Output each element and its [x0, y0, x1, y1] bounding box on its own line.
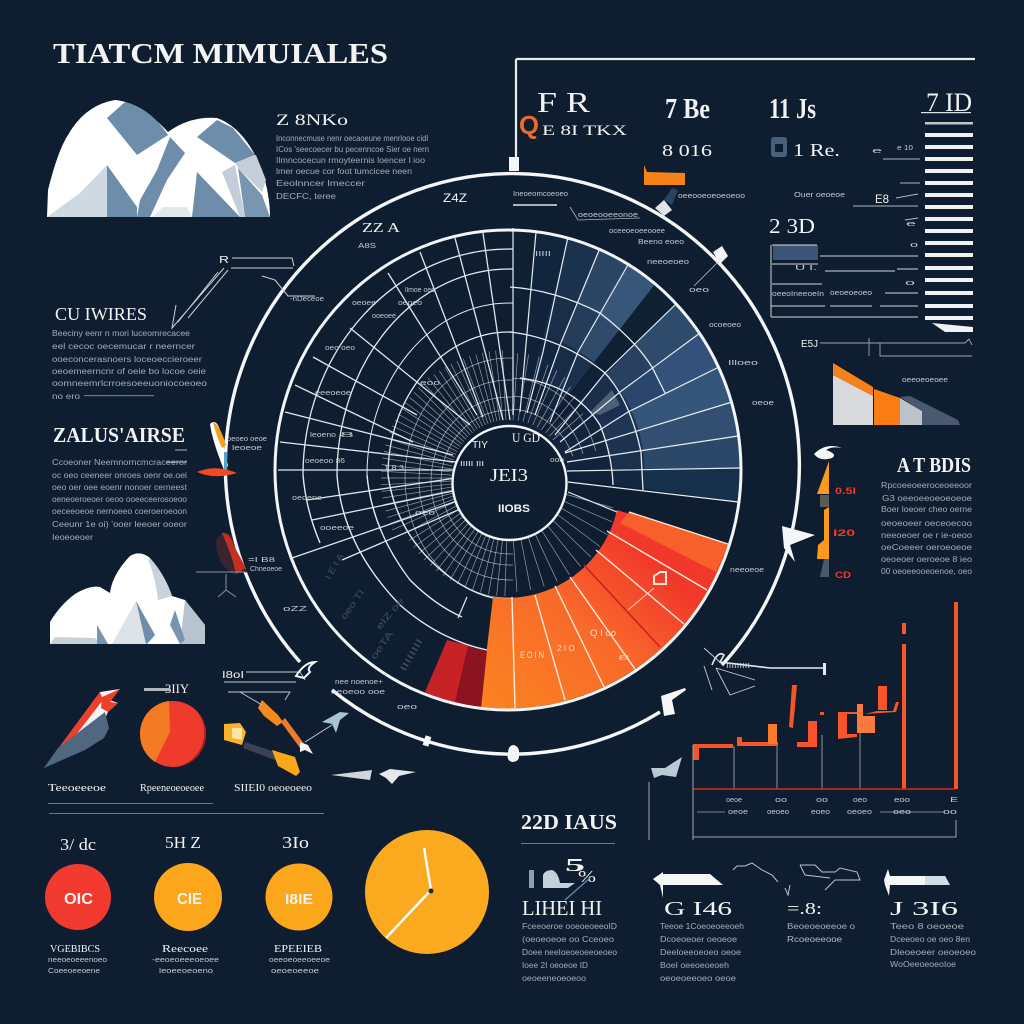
text block: top left note: Inconnecmuse nenr oecaoeune menrlooe cidl — [276, 134, 428, 143]
side labels next to striped column: E8 — [875, 192, 889, 206]
icon: arrow on ring right — [782, 526, 815, 562]
callout lower left of ring — [283, 606, 417, 711]
callout labels upper right of ring: oeo — [689, 287, 709, 294]
text block: left section one: no ero — [52, 392, 81, 401]
title: TIATCM MIMUIALES — [53, 38, 388, 70]
tiny chart labels: Q I oo — [590, 628, 616, 638]
text block: left section two: oeceeoeoe nernoeeo coeroeroeoon — [52, 507, 187, 516]
callout labels upper right of ring: Ineoeomcoeoeo — [513, 191, 568, 198]
heading: bottom section: 22D IAUS — [521, 810, 617, 834]
stat: F R: Q — [519, 110, 539, 140]
radial grid: left arcs — [302, 248, 596, 651]
text block: left section two: Ieoeoeoer — [52, 533, 93, 542]
icon: chair marker left of ring — [196, 533, 282, 597]
side labels next to striped column: o — [905, 280, 915, 287]
tiny chart labels: oeo oeo — [325, 345, 355, 352]
ghost labels lower left of wheel: eIZ oe — [374, 596, 406, 631]
bar chart labels: E — [950, 797, 959, 804]
bar chart labels: oeoeo — [847, 809, 872, 816]
column one: chart icon and text: oeoeeneoeoeoo — [522, 974, 587, 983]
text block: left section two: oc oeo ceeneer onroes oenr oe.oei — [52, 471, 187, 480]
tiny chart labels: ooeoee — [372, 313, 396, 320]
column one: chart icon and text: (oeoeoeoe oo Cceoeo — [522, 935, 615, 944]
text block: right column — [881, 481, 973, 576]
text block: right column: Boer loeoer cheo oerne — [881, 505, 973, 514]
vertical orange gauge: 0.5I — [835, 486, 856, 496]
column two: arrow and text: Teeoe 1Coeoeoeeoeh — [660, 922, 744, 931]
rocket, pie and tool captions: SIIEI0 oeoeoeeo — [234, 783, 312, 794]
text block: top left note — [276, 134, 429, 201]
line above left section two text — [167, 450, 187, 462]
callout upper left of ring — [172, 255, 324, 328]
callout lower left of ring: neoeoo ooe — [331, 689, 385, 696]
rocket, pie and tool captions: 3IIY — [165, 681, 190, 696]
column three: map line icon and text — [733, 863, 860, 944]
orange and red sector — [425, 510, 728, 709]
vertical orange gauge: I20 — [833, 528, 855, 538]
blue sector wedges — [510, 230, 740, 502]
column four: arrow and text: Teeo 8 oeoeoe — [890, 922, 965, 931]
stat circle: red: neeoeoeeenoeo — [48, 957, 107, 964]
icon: large mountain — [47, 100, 270, 217]
column four: arrow and text: WoOeeoeoeoIoe — [890, 960, 957, 969]
text block: right column: oeoeoeer oeceoecoo — [881, 519, 973, 528]
text block: right column: Rpcoeeoeeroceoeeoor — [881, 481, 972, 490]
callout labels upper right of ring: Ouer oeoeoe — [794, 192, 845, 199]
side labels next to striped column — [853, 145, 920, 287]
circle outline inner ring — [275, 230, 741, 710]
column one: chart icon and text: Doee neeIoeoeoeeoeoeo — [522, 948, 618, 957]
icon: torch tool — [224, 700, 349, 776]
tiny chart labels: oeoene — [292, 495, 322, 502]
stat circle: orange one — [152, 833, 222, 975]
text block: left section two: oeo oer oee eoenr nonoer cerneest — [52, 483, 188, 492]
text block: top left note: lmer oecue cor foot tumcicee neen — [276, 167, 412, 176]
bar chart labels: eoo — [894, 797, 910, 804]
scale line: E5J — [801, 339, 818, 350]
text block: left section two: Ccoeoner Neemnorncmcraceeror — [52, 458, 187, 467]
tiny chart labels: oeoeoo 86 — [305, 458, 345, 465]
callout labels upper right of ring: Beeno eoeo — [638, 239, 684, 246]
callout labels upper right of ring: oceeoeoeeooee — [609, 228, 665, 235]
section dividers — [48, 803, 324, 814]
outer ring — [225, 174, 799, 754]
icon: swirl — [814, 446, 842, 459]
arrow icons below ring — [331, 769, 416, 784]
text block: top left note: ICos 'seecoecer bu pecenncoe Sier oe nern — [276, 145, 429, 154]
heading: right column: A T BDIS — [897, 453, 971, 477]
bar chart labels: oeoe — [726, 797, 742, 804]
ring marker bottom — [423, 735, 519, 762]
column two: arrow and text: Dcoeoeoer oeoeoe — [660, 935, 738, 944]
column four: arrow and text: Dceeoeo oe oeo 8en — [890, 935, 970, 944]
chart hub — [452, 426, 566, 540]
callout upper left of ring: R — [219, 255, 229, 266]
stat: F R — [519, 87, 627, 140]
tiny chart labels: IIIII — [535, 251, 551, 258]
pie icon — [140, 701, 206, 767]
ghost labels lower left of wheel: I E I A — [323, 552, 346, 581]
striped column — [925, 122, 973, 332]
bar chart labels — [726, 797, 959, 816]
column four: arrow and text: J 3I6 — [890, 898, 958, 920]
mini table: oeoeoeoeo — [830, 290, 872, 297]
tiny chart labels: eeeoeoe — [315, 390, 351, 397]
side labels next to striped column: e — [906, 221, 916, 228]
bar chart labels: oo — [816, 797, 828, 804]
callout: ring top label: A8S — [358, 243, 376, 250]
callout labels upper right of ring — [513, 191, 845, 574]
bar chart labels: eoeo — [811, 809, 830, 816]
mini table: oeeoIneeoeIn — [772, 291, 824, 298]
callout labels upper right of ring: oeoe — [752, 400, 774, 407]
stat circle: red: VGEBIBCS — [50, 943, 100, 955]
column one: chart icon and text: Fceeoerоe ooeoeoeeoID — [522, 922, 617, 931]
bar chart axis — [693, 788, 956, 790]
stat circle: red: OIC — [64, 891, 93, 908]
callout: ring top label — [358, 191, 467, 250]
chart hub: IIOBS — [498, 503, 530, 515]
stat circle: orange two — [266, 833, 332, 975]
heading: left section one: CU IWIRES — [55, 304, 147, 324]
ghost labels lower left of wheel: oeTA — [368, 629, 395, 661]
column two: arrow and text: oeoeoeeoeo oeoe — [660, 974, 737, 983]
divider under heading — [521, 843, 615, 844]
side labels next to striped column: o — [910, 242, 918, 249]
stat circle: orange two: oeeoeoeeoeeoe — [269, 957, 330, 964]
stat circle: orange one: -eeoeoeeeoeoee — [152, 957, 219, 964]
callout lines near tools — [224, 662, 315, 705]
chart callout — [704, 648, 826, 695]
text block: left section one: oomneemrlcrroesoeeuoniocoeoeo — [52, 379, 208, 388]
tiny chart labels: E O I N — [520, 650, 544, 660]
icon: pin left of ring: oeoeo oeoe — [227, 436, 267, 443]
column two: arrow and text: G I46 — [664, 898, 732, 920]
text block: right column: neeoeoer oe r ie-oeoo — [881, 531, 973, 540]
text block: left section one: Beeciny eenr n mori luceomrecacee — [52, 329, 191, 338]
tiny chart labels: eoo — [420, 380, 440, 387]
heading: mini table: 2 3D — [769, 214, 815, 238]
scale line — [801, 338, 972, 356]
text block: top left note: Eeolnncer lmeccer — [276, 179, 365, 188]
ghost labels lower left of wheel: oeo TI — [338, 588, 366, 621]
stat: 7 ID: 7 ID — [926, 88, 972, 117]
area chart: oeeoeoeoee — [902, 377, 948, 384]
column two: arrow and text: Deeloeeoeoeo oeoe — [660, 948, 742, 957]
tool callout label: I8oI — [222, 670, 244, 681]
column three: map line icon and text: =.8: — [787, 899, 822, 918]
bar chart labels: oo — [775, 797, 787, 804]
text block: left section two — [52, 458, 188, 542]
stat circle: orange one: leoeeoeoeno — [159, 968, 213, 975]
text block: left section one: oeoemeerncnr of oeie bo locoe oeie — [52, 367, 207, 376]
vertical orange gauge — [817, 461, 856, 580]
mini table — [771, 245, 918, 317]
icon: small mountain — [50, 553, 205, 644]
tiny chart labels: oeo — [415, 510, 435, 517]
stat circle: orange two: 3Io — [282, 833, 309, 852]
radial grid: major left spokes — [278, 233, 510, 560]
text block: left section two: oeneoeroeoer oeoo ooeeceerosoeoo — [52, 495, 188, 504]
stat circle: orange two: I8IE — [285, 891, 313, 908]
text block: left section one: ooeconcerasnoers loceoeccieroeer — [52, 355, 202, 364]
side labels next to striped column: e — [872, 148, 882, 155]
tiny chart labels: oeoeo — [398, 300, 422, 307]
column three: map line icon and text: Rcoeoeeooe — [787, 935, 843, 944]
chart callout: IIIIIIIII — [726, 663, 750, 670]
column one: chart icon and text — [522, 855, 618, 983]
rocket, pie and tool captions: Teeoeeeoe — [48, 782, 106, 794]
bar chart labels: oeoeo — [767, 809, 789, 816]
tiny chart labels: oeoee — [352, 300, 376, 307]
tiny chart labels: 8 — [618, 655, 630, 662]
stat: 11 Js — [769, 94, 840, 160]
text block: right column: oeoeoer oeroeoe 8 ieo — [881, 555, 973, 564]
stat circle: orange one: CIE — [177, 891, 202, 908]
area chart — [833, 363, 960, 425]
tiny chart labels: llmoe oeo — [405, 287, 435, 294]
stat circle: orange two: oeoeoeeoe — [271, 968, 319, 975]
bar chart bars — [693, 602, 958, 789]
tiny chart labels: 1 8 3 — [384, 465, 404, 472]
stat: 7 Be: 7 Be — [665, 94, 710, 125]
mini table: U I. — [795, 265, 817, 272]
tiny chart labels: 8 — [340, 432, 354, 439]
callout: ring top label: Z4Z — [443, 191, 467, 205]
heading: top left note: Z 8NKo — [276, 112, 348, 129]
stat: F R: E 8I TKX — [542, 123, 627, 139]
radial grid: thin spokes — [381, 350, 613, 596]
chart hub: IIIII III — [460, 461, 484, 468]
stat circle: orange one: 5H Z — [165, 833, 201, 852]
bar chart labels: oeoe — [728, 809, 748, 816]
chart hub: ooo — [550, 457, 564, 464]
chart hub: TIY — [472, 440, 488, 451]
bar chart stems — [734, 733, 860, 789]
icon: ring marker lower right — [661, 688, 686, 716]
column four: arrow and text — [884, 869, 977, 969]
callout labels upper right of ring: Illoeo — [728, 360, 758, 367]
stat circle: orange one: Reecoee — [162, 943, 208, 955]
rocket, pie and tool captions: Rpeeneoeoeoee — [140, 783, 205, 794]
callout labels upper right of ring: neeoeoe — [730, 567, 764, 574]
column two: arrow and text — [653, 872, 744, 983]
stat: 7 Be: 8 016 — [662, 141, 712, 160]
column one: chart icon and text: 5 — [565, 855, 585, 875]
bar chart labels: oo — [943, 809, 957, 816]
tiny chart labels: ooeeoe — [320, 525, 354, 532]
text block: left section one — [52, 329, 208, 401]
icon: pin left of ring — [197, 422, 267, 476]
column three: map line icon and text: Beoeoeoeeoe o — [787, 922, 856, 931]
callout lower left of ring: oeo — [397, 704, 417, 711]
tiny chart labels: 2 I O — [557, 644, 575, 653]
rocket, pie and tool captions — [48, 681, 312, 794]
callout: ring top label: ZZ A — [362, 221, 401, 236]
ghost labels lower left of wheel: IIIIIIII — [398, 637, 425, 673]
stat circle: orange two: EPEEIEB — [274, 943, 322, 955]
chart hub: U GD — [512, 430, 540, 445]
column one: chart icon and text: % — [578, 867, 596, 886]
bar chart labels: oeo — [893, 809, 911, 816]
callout labels upper right of ring: oeoeooeeonoe — [578, 212, 638, 219]
callout upper left of ring: -nDeceoe — [290, 296, 324, 303]
text block: top left note: DECFC, teree — [276, 192, 337, 201]
stat circle: red — [45, 835, 111, 975]
column two: arrow and text: BoeI oeeoeoeoeh — [660, 961, 729, 970]
small wing icon — [651, 757, 682, 778]
icon: ring knob upper right — [655, 188, 728, 264]
bar chart labels: oeo — [853, 797, 867, 804]
orange flag — [644, 165, 685, 185]
text block: left section two: Ceeunr 1e oi) 'ooer leeoer ooeor — [52, 520, 187, 529]
callout labels upper right of ring: ocoeoeo — [709, 322, 741, 329]
bar chart brackets — [649, 745, 956, 840]
stat circle: red: Coeeoeeoene — [48, 968, 100, 975]
icon: rocket — [44, 689, 120, 768]
callout lower left of ring: oZZ — [283, 606, 308, 613]
callout lower left of ring: nee noenoe+ — [335, 679, 383, 686]
text block: top left note: Ilmncocecun rmoyteernis loencer l ioo — [276, 156, 426, 165]
heading: left section two: ZALUS'AIRSE — [53, 423, 185, 447]
icon: chair marker left of ring: Chneoeoe — [250, 566, 282, 573]
blue sector grid — [513, 228, 740, 512]
stat: 11 Js: 1 Re. — [793, 140, 840, 160]
column four: arrow and text: Dleoeoeer oeoeoeo — [890, 948, 977, 957]
callout labels upper right of ring: neeoeoeo — [647, 259, 689, 266]
top frame — [509, 59, 975, 171]
stat circle: red: 3/ dc — [60, 835, 96, 854]
stat: F R: F R — [537, 87, 591, 119]
tiny chart labels: leoeno — [310, 432, 336, 439]
bar chart — [649, 602, 959, 840]
column one: chart icon and text: Ioee 2I oeoeoe ID — [522, 961, 588, 970]
text block: right column: G3 oeeoeeoeoeoeoe — [882, 494, 973, 503]
side labels next to striped column: e 10 — [897, 145, 913, 152]
text block: left section one: eel cecoc oecemucar r neerncer — [52, 342, 195, 351]
vertical orange gauge: CD — [835, 570, 852, 580]
blue sector arcs — [510, 287, 665, 490]
divider under left section one — [84, 395, 154, 396]
text block: right column: 00 oeoeeooeoenoe, oeo — [881, 567, 973, 576]
icon: pin left of ring: leoeoe — [232, 445, 262, 452]
panel: radial chart — [225, 174, 799, 754]
icon: chair marker left of ring: =I B8 — [248, 557, 275, 564]
column one: chart icon and text: LIHEI HI — [522, 896, 602, 920]
stat: 7 Be — [662, 94, 712, 160]
clock circle — [365, 830, 489, 954]
ghost labels lower left of wheel — [323, 552, 425, 673]
callout labels upper right of ring: oeeooeoeoeoeoo — [678, 193, 745, 200]
stat: 11 Js: 11 Js — [769, 94, 816, 125]
text block: right column: oeCoeeer oeroeoeoe — [881, 543, 973, 552]
chart hub: JEI3 — [490, 465, 528, 485]
tiny chart labels — [292, 251, 666, 662]
